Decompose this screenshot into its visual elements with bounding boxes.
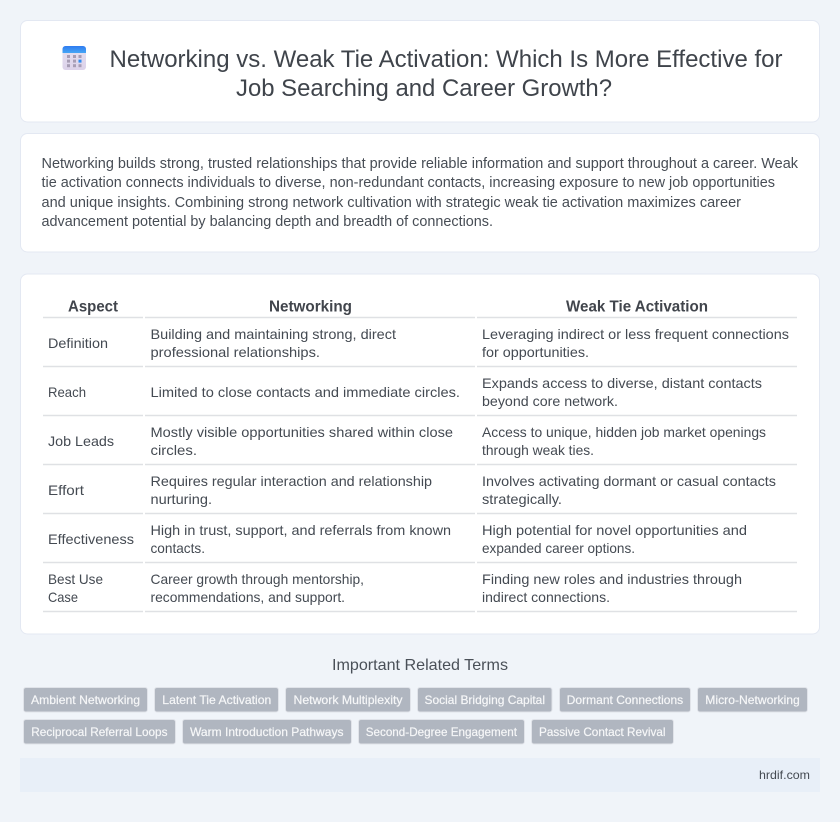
row: reach: Expands access to diverse, distant contacts <box>482 375 762 391</box>
row: job leads: circles. <box>150 442 197 458</box>
row: best use case: Finding new roles and industries through <box>482 571 742 587</box>
table header <box>68 298 708 316</box>
row: effectiveness: expanded career options. <box>482 540 635 556</box>
text block: introduction: tie activation connects individuals to diverse, non-redundant contacts, increasing exposure to new job opportunities <box>42 175 775 191</box>
row: effectiveness: High in trust, support, and referrals from known <box>150 522 451 538</box>
row: best use case: Career growth through mentorship, <box>150 571 364 587</box>
row: best use case: Case <box>48 589 78 605</box>
row: effort: Requires regular interaction and relationship <box>150 473 432 489</box>
row: definition <box>48 326 789 360</box>
tags: related terms: Network Multiplexity <box>294 693 402 707</box>
footer source text: hrdif.com <box>759 768 810 782</box>
row: reach: beyond core network. <box>482 393 618 409</box>
row: effectiveness: Effectiveness <box>48 531 134 547</box>
row: definition: Building and maintaining strong, direct <box>150 326 396 342</box>
title: Networking vs. Weak Tie Activation: Which Is More Effective for <box>110 46 782 73</box>
heading: important related terms: Important Related Terms <box>332 657 508 674</box>
text block: introduction: Networking builds strong, trusted relationships that provide reliable information and support throughout a career. Weak <box>42 156 799 172</box>
table header: Networking <box>269 298 352 316</box>
tags: related terms: Dormant Connections <box>567 693 683 707</box>
row: best use case: indirect connections. <box>482 589 610 605</box>
row: effectiveness <box>48 522 747 556</box>
row: best use case: recommendations, and support. <box>150 589 345 605</box>
tags: related terms: Ambient Networking <box>31 693 140 707</box>
tags: related terms: Passive Contact Revival <box>539 725 666 739</box>
footer <box>20 758 820 792</box>
table header: Weak Tie Activation <box>566 298 708 316</box>
title: Job Searching and Career Growth? <box>236 75 612 102</box>
row: definition: for opportunities. <box>482 344 589 360</box>
panel: comparison table <box>20 274 820 634</box>
row: definition: Definition <box>48 335 108 351</box>
text block: introduction: advancement potential by balancing depth and breadth of connections. <box>42 214 493 230</box>
icon: calendar <box>62 46 86 70</box>
row: effort: nurturing. <box>150 491 212 507</box>
row: definition: professional relationships. <box>150 344 320 360</box>
tags: related terms: Reciprocal Referral Loops <box>31 725 167 739</box>
tags: related terms: Latent Tie Activation <box>162 693 271 707</box>
row: effort <box>48 473 776 507</box>
panel: introduction <box>20 134 820 252</box>
tags: related terms: Warm Introduction Pathways <box>190 725 344 739</box>
text block: introduction <box>42 156 799 230</box>
row: best use case: Best Use <box>48 571 103 587</box>
table header: Aspect <box>68 298 119 316</box>
row: effort: Effort <box>48 482 84 498</box>
tags: related terms: Second-Degree Engagement <box>366 725 518 739</box>
row: best use case <box>48 571 742 605</box>
row: job leads <box>48 424 766 458</box>
row: reach: Limited to close contacts and immediate circles. <box>150 384 460 400</box>
row: effectiveness: contacts. <box>150 540 205 556</box>
title <box>110 46 782 102</box>
row: effort: strategically. <box>482 491 562 507</box>
row: reach <box>48 375 762 409</box>
row: job leads: Job Leads <box>48 433 114 449</box>
row: job leads: Access to unique, hidden job market openings <box>482 424 766 440</box>
panel: header <box>20 20 820 122</box>
row: reach: Reach <box>48 384 86 400</box>
row: definition: Leveraging indirect or less frequent connections <box>482 326 789 342</box>
row: job leads: through weak ties. <box>482 442 594 458</box>
tags: related terms: Social Bridging Capital <box>424 693 545 707</box>
tags: related terms: Micro-Networking <box>705 693 800 707</box>
tags: related terms <box>24 688 808 744</box>
text block: introduction: and unique insights. Combining strong network cultivation with strategic weak tie activation maximizes career <box>42 195 741 211</box>
row: effectiveness: High potential for novel opportunities and <box>482 522 747 538</box>
row: job leads: Mostly visible opportunities shared within close <box>150 424 453 440</box>
row: effort: Involves activating dormant or casual contacts <box>482 473 776 489</box>
